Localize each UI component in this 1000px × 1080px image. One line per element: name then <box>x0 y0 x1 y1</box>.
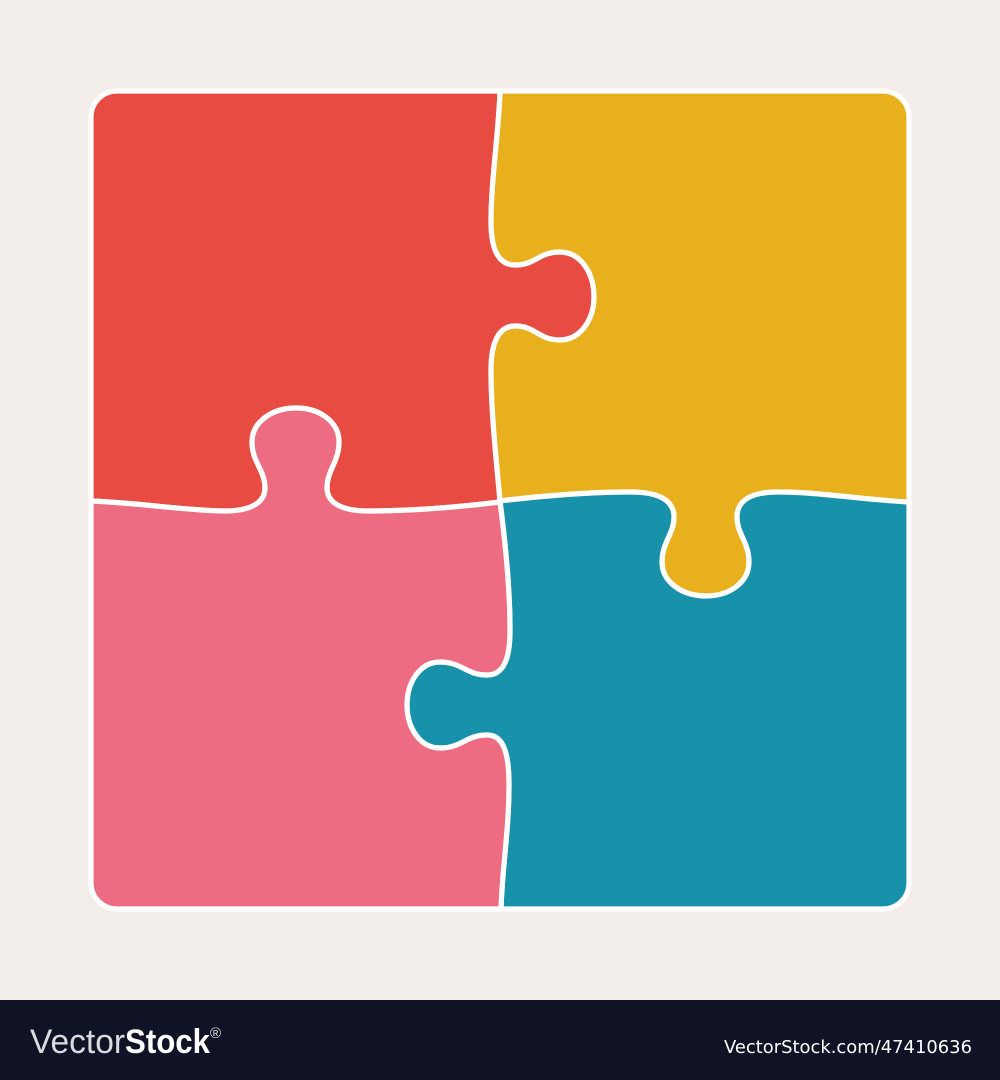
stock image id: VectorStock.com/47410636 <box>724 1037 972 1058</box>
footer bar <box>0 1000 1000 1080</box>
logo: VectorStock: Stock <box>125 1023 210 1061</box>
logo: VectorStock <box>30 1023 221 1061</box>
puzzle piece: red top-left <box>91 91 594 511</box>
puzzle piece: yellow top-right <box>491 91 909 596</box>
logo: VectorStock: ® <box>210 1025 221 1042</box>
puzzle piece: pink bottom-left <box>91 408 510 909</box>
puzzle piece: teal bottom-right <box>407 492 909 909</box>
logo: VectorStock: Vector <box>30 1023 125 1061</box>
puzzle: four interlocking pieces <box>91 91 909 909</box>
